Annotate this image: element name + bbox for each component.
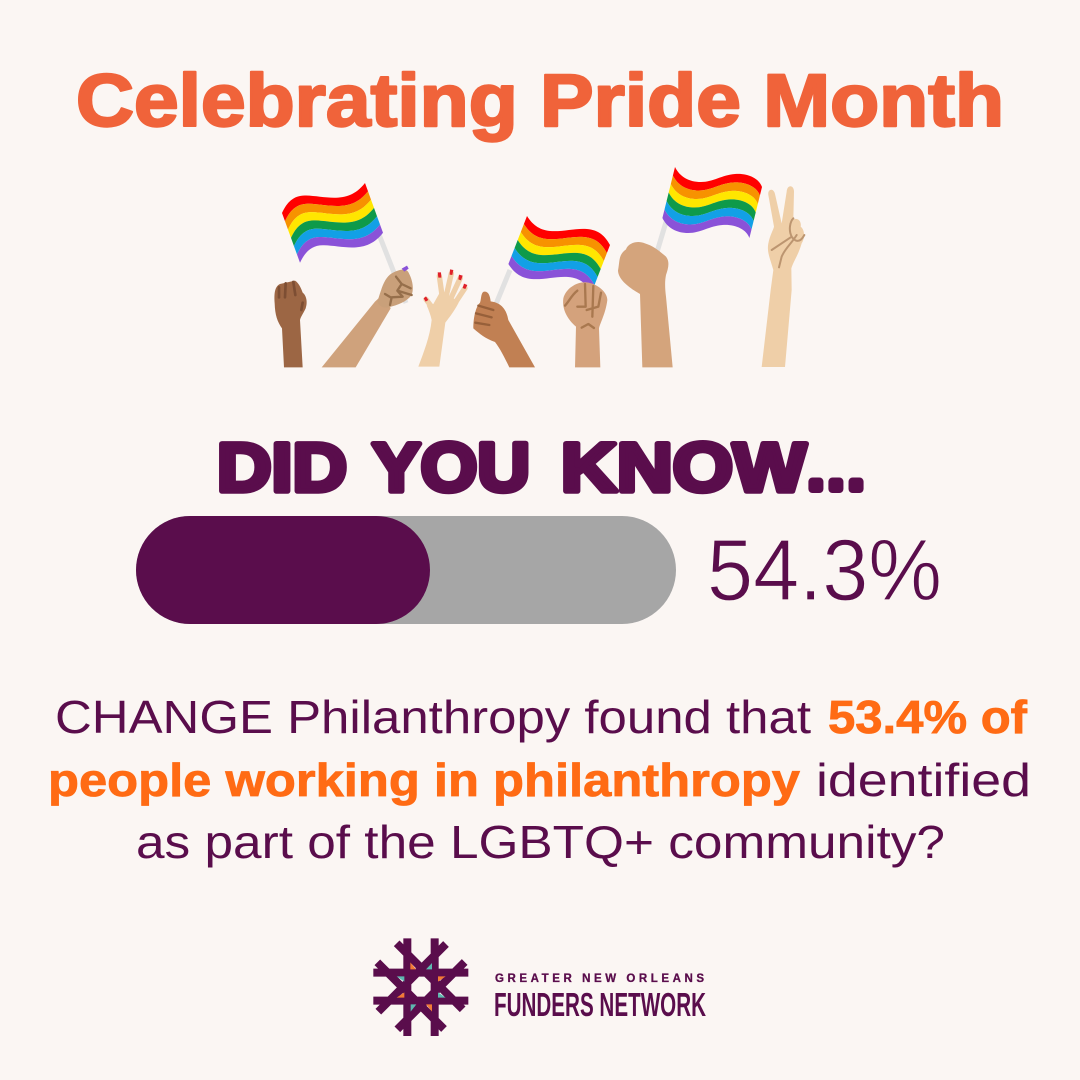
flag: left rainbow flag: [282, 183, 383, 263]
hand: open hand with red nails: [418, 269, 467, 367]
title: Celebrating Pride Month: [76, 59, 1004, 142]
heading: did you know: [217, 429, 863, 506]
flag: right rainbow flag: [662, 167, 762, 238]
hand: raised fist below right flag: [618, 242, 673, 367]
hand: arm holding left flag: [322, 266, 413, 367]
bar track: [136, 516, 676, 624]
heading: did you know: KNOW: [561, 429, 807, 506]
body text: as part of the LGBTQ+ community?: [136, 816, 945, 868]
logo text: Funders Network: FUNDERS NETWORK: [494, 986, 706, 1023]
logo text: Greater New Orleans: GREATER NEW ORLEANS: [495, 973, 704, 985]
hand: dark raised fist: [274, 281, 307, 367]
flag pole: middle flag: [496, 270, 510, 304]
bar fill: [136, 516, 430, 624]
flag: middle rainbow flag: [508, 216, 610, 293]
heading: did you know: ...: [809, 444, 863, 500]
hand: peace sign: [762, 186, 804, 367]
hand: fist beside middle flag: [563, 282, 607, 367]
logo mark: [373, 938, 468, 1036]
progress bar: [136, 516, 676, 624]
body text: people working in philanthropy: [48, 754, 800, 806]
heading: did you know: DID: [217, 429, 347, 506]
illustration: raised hands and rainbow flags: [274, 167, 804, 367]
heading: did you know: YOU: [372, 429, 530, 506]
flag pole: left flag: [378, 232, 406, 303]
hand: thumbs up fist: [473, 292, 535, 367]
body text: CHANGE Philanthropy found that: [55, 691, 811, 743]
logo: Greater New Orleans Funders Network: [373, 938, 706, 1036]
body text: identified: [816, 754, 1031, 806]
body text: 53.4% of: [828, 691, 1028, 743]
body text: [48, 691, 1031, 868]
percentage value: 54.3%: [707, 522, 942, 619]
flag pole: right flag: [657, 222, 666, 252]
